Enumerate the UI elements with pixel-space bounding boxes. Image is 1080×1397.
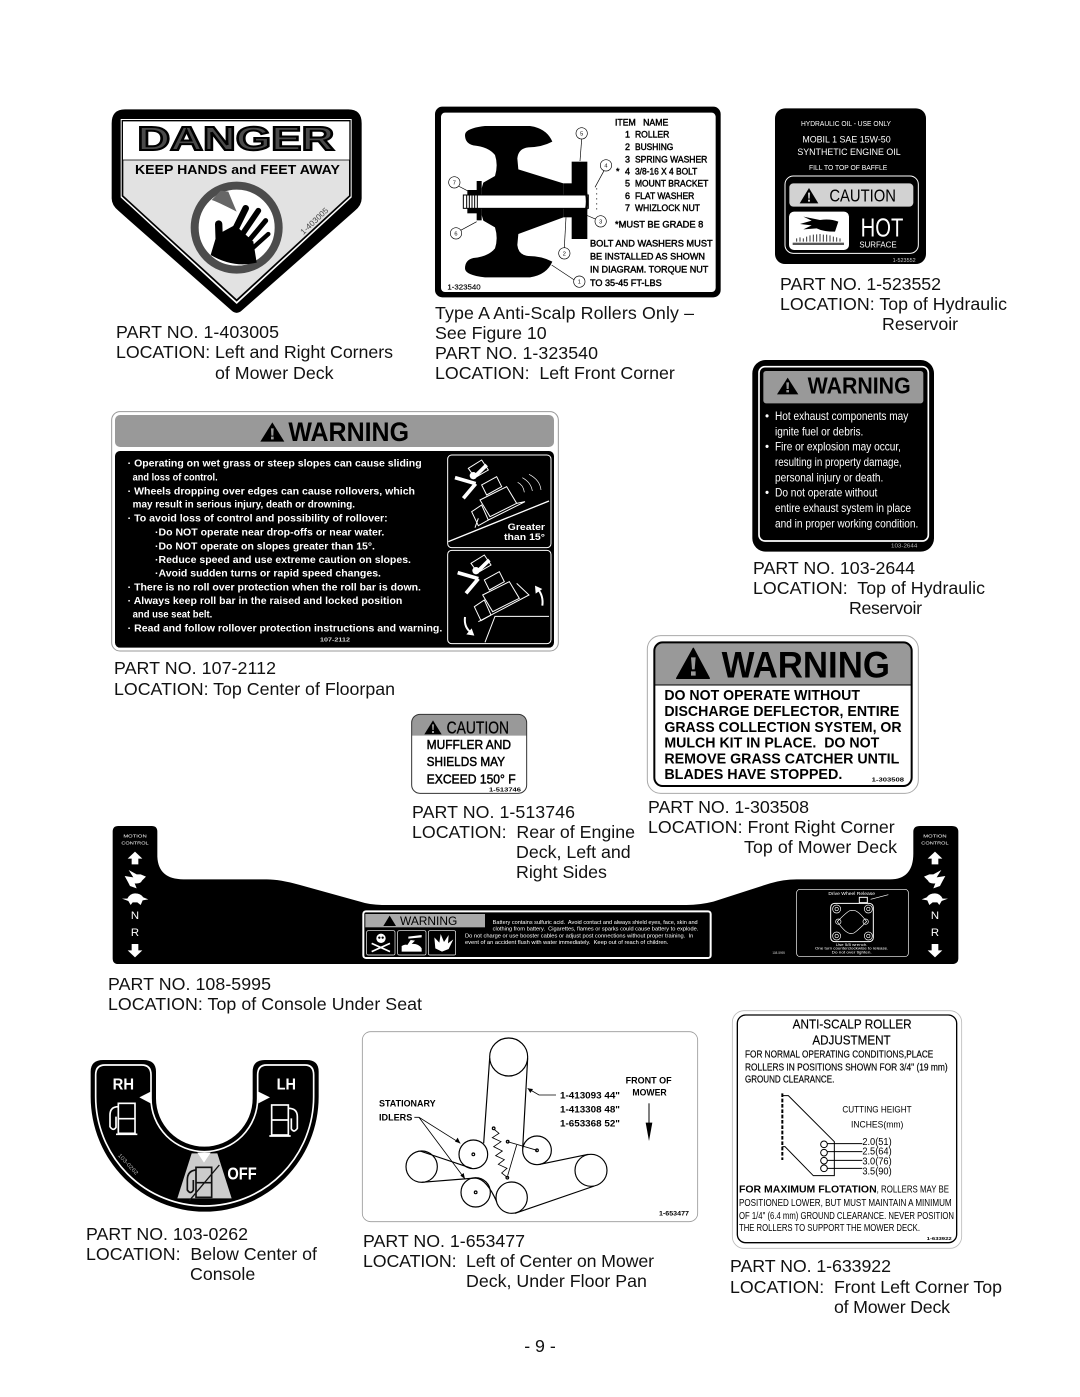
decal: anti-scalp roller adjustment 1-633922: 1-633922 — [927, 1236, 952, 1241]
belt labels: FRONT OF — [626, 1075, 672, 1085]
warning bullet text: • — [765, 410, 769, 423]
decal: fuel selector 103-0262: RH — [113, 1076, 134, 1093]
decal: fuel selector 103-0262: LH — [277, 1076, 296, 1093]
warning text list: ·Do NOT operate on slopes greater than 15°. — [155, 541, 375, 552]
caption: part 1-513746: Deck, Left and — [516, 842, 631, 862]
caption: part 1-523552: Reservoir — [882, 314, 958, 334]
caption: part 107-2112: PART NO. 107-2112 — [114, 658, 276, 678]
parts list: *MUST BE GRADE 8 — [615, 219, 703, 229]
warning text list: · Operating on wet grass or steep slopes can cause sliding — [128, 458, 422, 469]
panel: mower tipping over edge — [448, 550, 551, 644]
caption: part 1-303508 — [648, 797, 897, 857]
warning text list: ·Avoid sudden turns or rapid speed changes. — [155, 569, 381, 580]
warning bullet text: Fire or explosion may occur, — [775, 441, 901, 454]
cutting height diagram: CUTTING HEIGHT — [842, 1104, 912, 1114]
parts list: BE INSTALLED AS SHOWN — [590, 251, 705, 261]
cutting height diagram: INCHES(mm) — [851, 1119, 903, 1129]
decal: belt routing diagram 1-653477 — [362, 1032, 698, 1222]
parts list: BOLT AND WASHERS MUST — [590, 239, 713, 249]
maximum flotation note: OF 1/4" (6.4 mm) GROUND CLEARANCE. NEVER POSITION — [739, 1211, 954, 1222]
parts list: * — [616, 167, 620, 177]
caption: part 1-323540 — [435, 303, 694, 383]
roller cross-section drawing: 6 — [454, 231, 458, 237]
decal: exhaust warning 103-2644 — [752, 360, 934, 552]
right motion control column: R — [931, 927, 939, 939]
caption: part 1-653477: Deck, Under Floor Pan — [466, 1271, 647, 1291]
decal: hydraulic oil and hot surface caution: CAUTION — [829, 186, 896, 206]
icon: skull and crossbones — [372, 934, 390, 952]
icon: right fuel pump — [269, 1105, 297, 1136]
caption: part 1-403005: LOCATION: Left and Right Corners — [116, 342, 393, 362]
decal: danger keep hands and feet away: DANGER — [137, 121, 334, 158]
maximum flotation note: POSITIONED LOWER, BUT MUST MAINTAIN A MINIMUM — [739, 1198, 952, 1209]
battery warning box: Do not charge or use booster cables or adjust post connections without proper training. In — [465, 933, 693, 939]
caption: part 1-513746: PART NO. 1-513746 — [412, 802, 575, 822]
right motion control column — [921, 834, 949, 957]
decal: muffler caution 1-513746 — [412, 714, 527, 794]
warning text list: and use seat belt. — [133, 610, 212, 621]
caption: part 107-2112: LOCATION: Top Center of Floorpan — [114, 679, 395, 699]
decal: muffler caution 1-513746: 1-513746 — [489, 788, 521, 794]
panel: mower on slope — [448, 455, 551, 548]
decal: anti-scalp roller parts diagram: 1-323540 — [447, 284, 481, 291]
battery warning box: Battery contains sulfuric acid. Avoid contact and always shield eyes, face, skin and — [493, 920, 698, 926]
caption: part 1-523552: LOCATION: Top of Hydraulic — [780, 294, 1007, 314]
parts list: BUSHING — [635, 142, 673, 152]
maximum flotation note: THE ROLLERS TO SUPPORT THE MOWER DECK. — [739, 1223, 920, 1234]
caution text — [427, 738, 516, 786]
caption: part 108-5995: PART NO. 108-5995 — [108, 974, 271, 994]
caution text: EXCEED 150° F — [427, 772, 516, 786]
caption: part 1-523552: PART NO. 1-523552 — [780, 274, 941, 294]
decal: console motion control 108-5995: 108-5995 — [772, 950, 786, 955]
parts list: 5 — [625, 179, 630, 189]
decal: exhaust warning 103-2644: 103-2644 — [891, 544, 917, 550]
right motion control column: CONTROL — [921, 840, 949, 846]
warning text list: may result in serious injury, death or drowning. — [133, 500, 355, 511]
icon: hand and blade in prohibition circle — [195, 186, 279, 270]
left motion control column — [121, 834, 149, 957]
right motion control column: N — [931, 910, 939, 922]
cutting height diagram: 2.5(64) — [862, 1147, 892, 1158]
decal: danger keep hands and feet away: KEEP HANDS and FEET AWAY — [135, 162, 340, 177]
decal: fuel selector 103-0262 — [91, 1060, 319, 1212]
parts list: 1 — [625, 129, 630, 139]
warning text list: · Wheels dropping over edges can cause rollovers, which — [128, 486, 415, 497]
decal: hydraulic oil and hot surface caution: SURFACE — [859, 239, 897, 249]
caption: part 1-633922 — [730, 1256, 1002, 1317]
caption: part 103-2644: PART NO. 103-2644 — [753, 558, 915, 578]
cutting height diagram: 3.0(76) — [862, 1157, 892, 1168]
caption: part 1-303508: PART NO. 1-303508 — [648, 797, 809, 817]
battery warning box: event of an accident flush with water immediately. Keep out of reach of children. — [465, 940, 668, 946]
right motion control column: MOTION — [923, 834, 947, 840]
caption: part 1-513746 — [412, 802, 635, 882]
caption: part 1-513746: Right Sides — [516, 862, 607, 882]
decal: discharge deflector warning 1-303508: 1-303508 — [872, 778, 904, 784]
decal: rollover warning 107-2112: Greater — [508, 522, 546, 532]
decal: anti-scalp roller parts diagram — [435, 107, 721, 297]
warning text list: · Read and follow rollover protection instructions and warning. — [128, 624, 442, 635]
caption: part 103-0262: Console — [190, 1264, 255, 1284]
warning text list — [128, 458, 442, 635]
battery warning box: WARNING — [400, 914, 457, 928]
caption: part 1-653477 — [363, 1231, 654, 1291]
warning bullet text: and in proper working condition. — [775, 517, 918, 530]
drive wheel release panel: One turn counterclockwise to release. — [815, 947, 888, 951]
parts list: WHIZLOCK NUT — [635, 203, 700, 213]
belt labels: 1-653368 52" — [560, 1119, 620, 1129]
maximum flotation note: , ROLLERS MAY BE — [877, 1185, 949, 1196]
decal: anti-scalp roller adjustment 1-633922 — [732, 1011, 962, 1248]
caption: part 1-633922: PART NO. 1-633922 — [730, 1256, 891, 1276]
belt labels: MOWER — [632, 1088, 667, 1098]
adjustment title and instructions: ADJUSTMENT — [812, 1033, 891, 1047]
caption: part 1-323540: LOCATION: Left Front Corner — [435, 363, 675, 383]
battery warning box — [363, 911, 711, 958]
cutting height diagram: 2.0(51) — [862, 1137, 892, 1148]
parts list: 2 — [625, 142, 630, 152]
roller cross-section drawing: 3 — [599, 219, 602, 225]
belt labels: 1-413093 44" — [560, 1090, 620, 1100]
icon: corrosive spill — [402, 935, 422, 952]
warning text: DISCHARGE DEFLECTOR, ENTIRE — [664, 704, 899, 720]
cutting height diagram — [782, 1093, 912, 1178]
left motion control column: MOTION — [123, 834, 147, 840]
parts list — [590, 117, 713, 288]
arrow: front of mower — [646, 1103, 652, 1141]
decal: rollover warning 107-2112 — [112, 412, 558, 651]
warning bullet text: entire exhaust system in place — [775, 502, 911, 515]
decal: danger keep hands and feet away: 1-403005 — [299, 206, 331, 236]
warning bullet text — [765, 410, 918, 530]
decal: fuel selector 103-0262: OFF — [227, 1163, 257, 1183]
belt labels: STATIONARY — [379, 1099, 436, 1109]
caption: part 103-2644: LOCATION: Top of Hydraulic — [753, 578, 985, 598]
decal: rollover warning 107-2112: 107-2112 — [320, 638, 350, 644]
caption: part 1-523552 — [780, 274, 1007, 334]
warning text: BLADES HAVE STOPPED. — [664, 767, 842, 783]
icon: caution triangle — [800, 188, 818, 203]
adjustment title and instructions: FOR NORMAL OPERATING CONDITIONS,PLACE — [745, 1050, 934, 1061]
warning text list: ·Reduce speed and use extreme caution on slopes. — [155, 555, 411, 566]
left motion control column: R — [131, 927, 139, 939]
warning text list: and loss of control. — [133, 472, 218, 483]
warning bullet text: personal injury or death. — [775, 471, 883, 484]
decal: discharge deflector warning 1-303508 — [647, 636, 918, 793]
warning text: DO NOT OPERATE WITHOUT — [664, 688, 860, 704]
warning text: REMOVE GRASS CATCHER UNTIL — [664, 751, 900, 767]
parts list: 6 — [625, 191, 630, 201]
caption: part 1-513746: LOCATION: Rear of Engine — [412, 822, 635, 842]
heading: warning: WARNING — [808, 372, 911, 398]
maximum flotation note — [739, 1185, 954, 1234]
adjustment title and instructions: GROUND CLEARANCE. — [745, 1074, 834, 1085]
belt labels: IDLERS — [379, 1113, 412, 1123]
parts list: FLAT WASHER — [635, 191, 695, 201]
heading: warning: WARNING — [288, 417, 409, 447]
decal: fuel selector 103-0262: 103-0262 — [116, 1153, 139, 1177]
caption: part 1-403005 — [116, 322, 393, 383]
decal: hydraulic oil and hot surface caution: 1-523552 — [893, 258, 916, 264]
battery warning box: clothing from battery. Cigarettes, flames or sparks could cause battery to explode. — [493, 927, 698, 933]
parts list: SPRING WASHER — [635, 154, 708, 164]
decal: rollover warning 107-2112: than 15° — [504, 532, 545, 542]
roller cross-section drawing: 5 — [580, 131, 583, 137]
left motion control column: N — [131, 910, 139, 922]
warning bullet text: ignite fuel or debris. — [775, 425, 863, 438]
parts list: MOUNT BRACKET — [635, 179, 709, 189]
caption: part 107-2112 — [114, 658, 395, 699]
caption: part 103-0262: PART NO. 103-0262 — [86, 1224, 248, 1244]
parts list: 3 — [625, 154, 630, 164]
caption: part 1-653477: LOCATION: Left of Center on Mower — [363, 1251, 654, 1271]
caption: part 1-323540: Type A Anti-Scalp Rollers Only – — [435, 303, 694, 323]
parts list: IN DIAGRAM. TORQUE NUT — [590, 265, 709, 275]
warning text — [664, 688, 902, 783]
page number: - 9 - — [524, 1336, 556, 1356]
caution text: SHIELDS MAY — [427, 755, 506, 769]
maximum flotation note: FOR MAXIMUM FLOTATION — [739, 1185, 877, 1196]
parts list: TO 35-45 FT-LBS — [590, 278, 662, 288]
adjustment title and instructions: ANTI-SCALP ROLLER — [793, 1017, 912, 1031]
decal: hydraulic oil and hot surface caution: SYNTHETIC ENGINE OIL — [797, 147, 901, 157]
decal: belt routing diagram 1-653477: 1-653477 — [659, 1212, 690, 1218]
icon: explosion — [434, 934, 453, 952]
warning bullet text: resulting in property damage, — [775, 456, 902, 469]
warning bullet text: Do not operate without — [775, 487, 878, 500]
caption: part 1-403005: of Mower Deck — [215, 363, 334, 383]
drive wheel release panel: Do not over tighten. — [832, 950, 872, 954]
roller cross-section drawing: 4 — [604, 163, 608, 169]
pulleys and belt — [406, 1038, 607, 1213]
decal: hydraulic oil and hot surface caution — [775, 108, 926, 264]
caption: part 103-0262: LOCATION: Below Center of — [86, 1244, 317, 1264]
cutting height diagram: 3.5(90) — [862, 1167, 892, 1178]
caption: part 108-5995 — [108, 974, 422, 1014]
heading: caution: CAUTION — [447, 718, 509, 738]
warning text list: ·Do NOT operate near drop-offs or near water. — [155, 528, 384, 539]
decal: danger keep hands and feet away — [112, 109, 362, 313]
warning bullet text: Hot exhaust components may — [775, 410, 908, 423]
icon: hand over hot surface — [793, 217, 844, 245]
warning text: GRASS COLLECTION SYSTEM, OR — [664, 720, 902, 736]
warning text list: · Always keep roll bar in the raised and locked position — [128, 596, 402, 607]
caption: part 1-633922: of Mower Deck — [834, 1297, 950, 1317]
drive wheel release panel: Drive Wheel Release — [828, 891, 875, 897]
decal: console motion control 108-5995 — [113, 826, 958, 964]
drive wheel release panel: Use 5/8 wrench. — [836, 943, 867, 947]
decal: hydraulic oil and hot surface caution: HYDRAULIC OIL - USE ONLY — [801, 119, 891, 128]
roller cross-section drawing: 2 — [563, 251, 566, 257]
caption: part 1-303508: LOCATION: Front Right Corner — [648, 817, 895, 837]
belt labels — [379, 1075, 672, 1129]
warning text: MULCH KIT IN PLACE. DO NOT — [664, 736, 880, 752]
caption: part 1-323540: PART NO. 1-323540 — [435, 343, 598, 363]
roller cross-section drawing: 7 — [453, 180, 456, 186]
parts list: ROLLER — [635, 129, 670, 139]
caption: part 1-653477: PART NO. 1-653477 — [363, 1231, 525, 1251]
caution text: MUFFLER AND — [427, 738, 511, 752]
caption: part 103-2644: Reservoir — [849, 598, 922, 618]
caption: part 1-403005: PART NO. 1-403005 — [116, 322, 279, 342]
parts list: 3/8-16 X 4 BOLT — [635, 167, 698, 177]
decal: hydraulic oil and hot surface caution: MOBIL 1 SAE 15W-50 — [802, 134, 891, 144]
warning bullet text: • — [765, 487, 769, 500]
icon: fuel pump off — [187, 1165, 219, 1201]
drive wheel release panel — [797, 889, 908, 957]
icon: left fuel pump — [110, 1103, 137, 1134]
roller cross-section drawing — [449, 126, 612, 287]
caption: part 108-5995: LOCATION: Top of Console Under Seat — [108, 994, 422, 1014]
warning text list: · To avoid loss of control and possibility of rollover: — [128, 514, 388, 525]
parts list: ITEM NAME — [615, 117, 668, 127]
caption: part 103-2644 — [753, 558, 985, 618]
parts list: 7 — [625, 203, 630, 213]
belt labels: 1-413308 48" — [560, 1104, 620, 1114]
caption: part 1-303508: Top of Mower Deck — [744, 837, 897, 857]
decal: hydraulic oil and hot surface caution: HOT — [861, 213, 903, 243]
adjustment title and instructions — [745, 1017, 948, 1085]
parts list: 4 — [625, 167, 630, 177]
warning bullet text: • — [765, 441, 769, 454]
warning text list: · There is no roll over protection when the roll bar is down. — [128, 582, 421, 593]
roller cross-section drawing: 1 — [578, 280, 581, 286]
heading: warning: WARNING — [722, 645, 890, 686]
adjustment title and instructions: ROLLERS IN POSITIONS SHOWN FOR 3/4" (19 mm) — [745, 1063, 948, 1074]
caption: part 103-0262 — [86, 1224, 317, 1284]
decal: hydraulic oil and hot surface caution: FILL TO TOP OF BAFFLE — [809, 163, 887, 172]
left motion control column: CONTROL — [121, 840, 149, 846]
caption: part 1-633922: LOCATION: Front Left Corner Top — [730, 1277, 1002, 1297]
caption: part 1-323540: See Figure 10 — [435, 323, 547, 343]
